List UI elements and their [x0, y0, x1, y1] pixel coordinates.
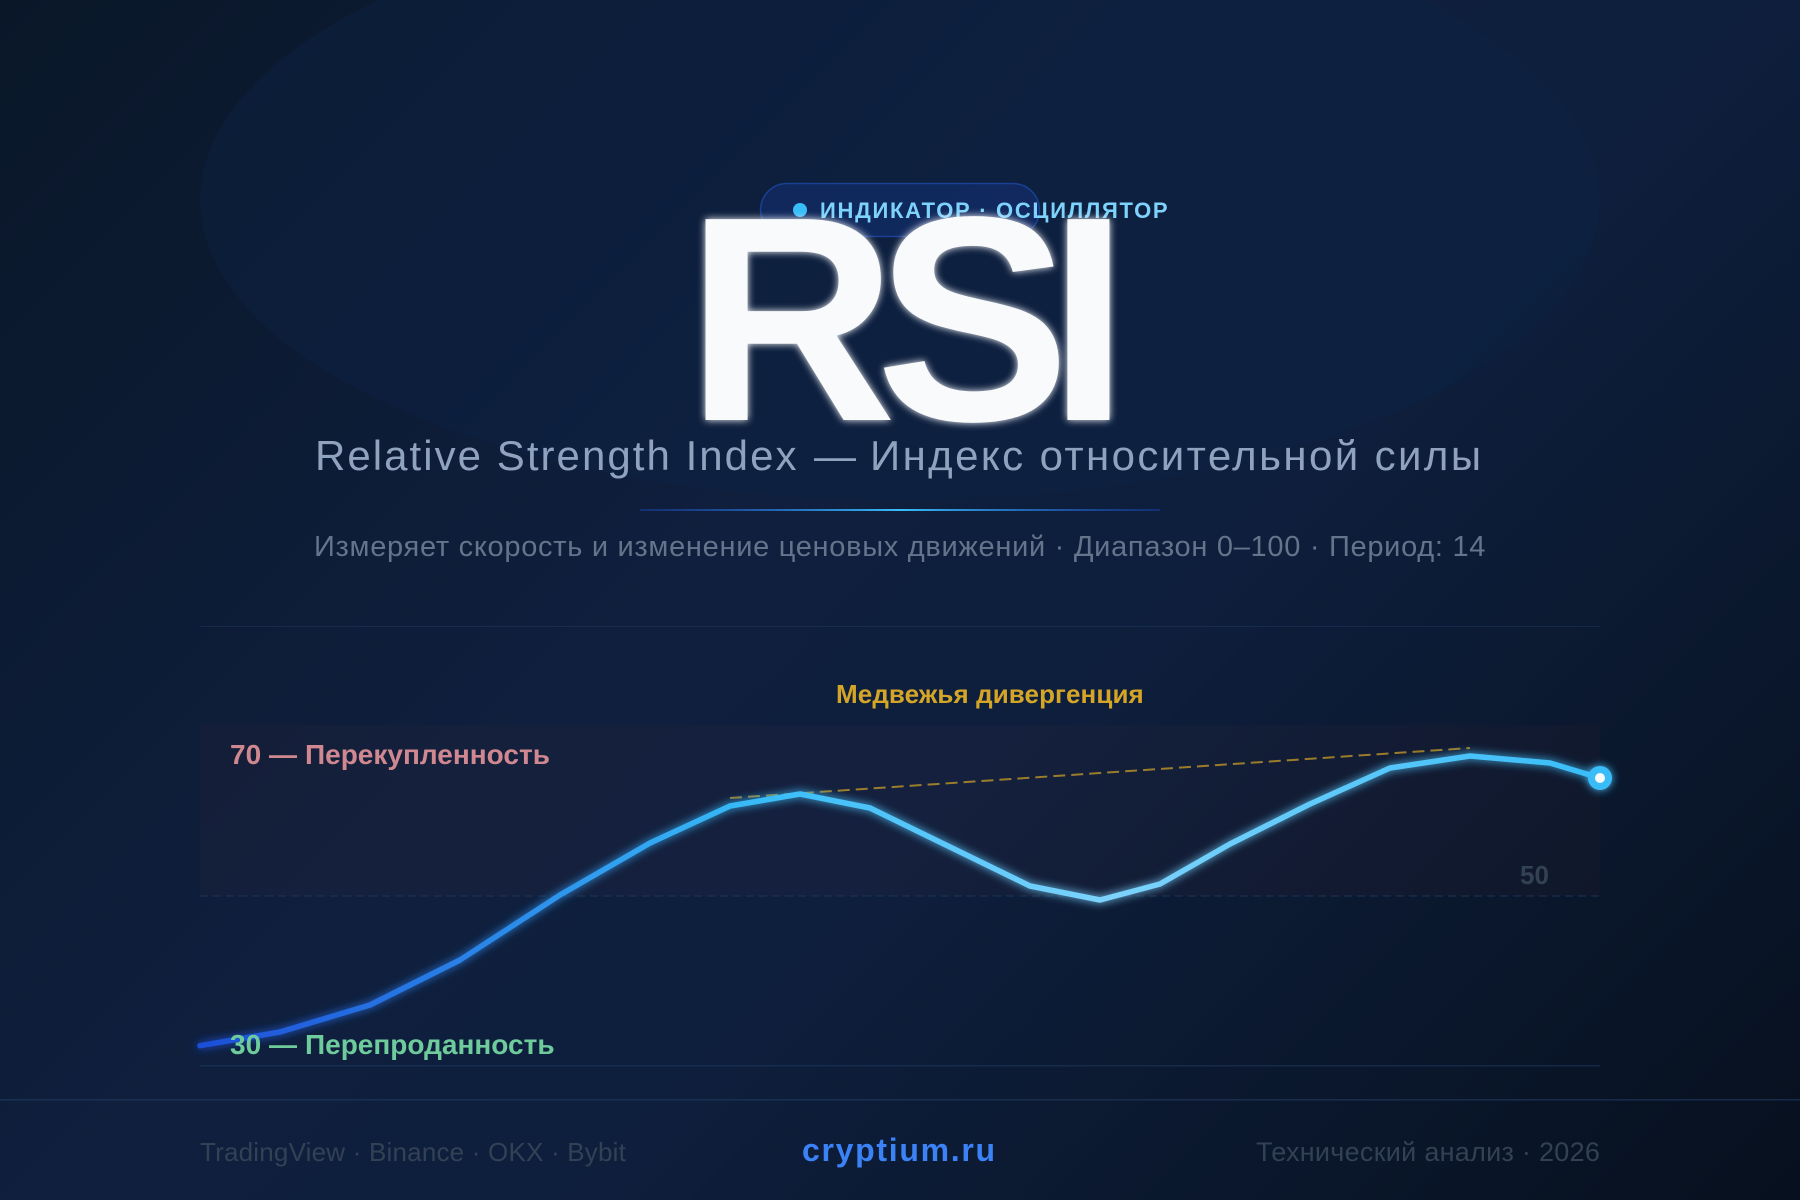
badge: ИНДИКАТОР · ОСЦИЛЛЯТОР — [820, 198, 1169, 223]
label 30: Перепроданность — [305, 1029, 555, 1060]
label 50: 50 — [1520, 860, 1549, 890]
footer brand: cryptium.ru — [802, 1132, 997, 1168]
subtitle: Индекс относительной силы — [870, 432, 1483, 479]
RSI line — [200, 756, 1600, 1046]
background ellipse — [200, 0, 1600, 500]
label 30: — — [269, 1029, 297, 1060]
description: Измеряет скорость и изменение ценовых движений · Диапазон 0–100 · Период: 14 — [314, 531, 1486, 563]
divergence label: Медвежья дивергенция — [836, 679, 1144, 709]
footer right: Технический анализ · 2026 — [1256, 1137, 1600, 1167]
badge — [760, 184, 1169, 236]
divergence line — [730, 748, 1470, 798]
subtitle: Relative Strength Index — [315, 432, 799, 479]
label 70: Перекупленность — [305, 739, 550, 770]
title: RSI — [686, 156, 1112, 482]
label 70: — — [269, 739, 297, 770]
footer — [0, 1099, 1800, 1168]
label 70: 70 — [230, 739, 261, 770]
divider — [640, 509, 1160, 511]
chart — [200, 626, 1612, 1066]
end point — [1588, 766, 1612, 790]
overbought zone — [200, 725, 1600, 896]
footer left: TradingView · Binance · OKX · Bybit — [200, 1137, 627, 1167]
label 30: 30 — [230, 1029, 261, 1060]
subtitle: — — [814, 432, 856, 479]
